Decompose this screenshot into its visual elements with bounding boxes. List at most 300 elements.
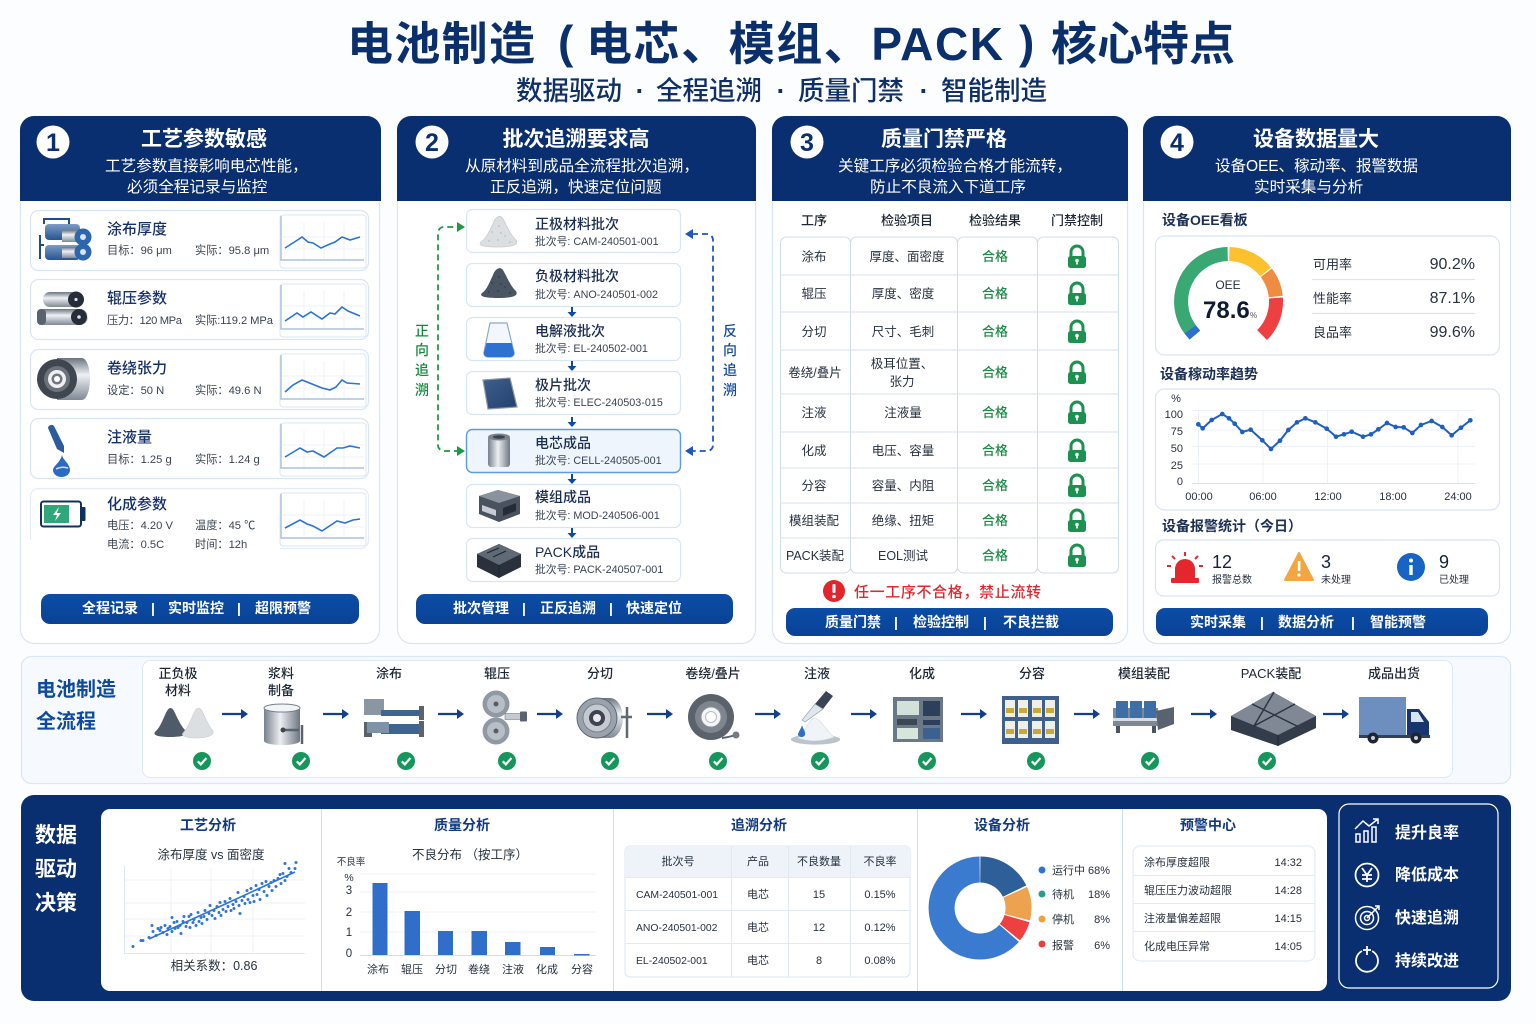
panel 4: equipment data [1143, 116, 1511, 644]
batch: electrolyte [466, 318, 680, 360]
bar chart: 1 [346, 927, 352, 939]
row: coating thickness: 涂布厚度 [107, 220, 167, 238]
row: coating thickness: 实际：95.8 μm [195, 243, 269, 257]
process analysis: 涂布厚度 vs 面密度 [158, 847, 265, 862]
batch: module: 模组成品 [535, 489, 591, 505]
panel 4 header: 设备OEE、稼动率、报警数据 [1215, 157, 1418, 175]
icon: pack box [477, 544, 521, 578]
sparkline [280, 215, 366, 268]
donut legend: 停机 [1052, 912, 1074, 926]
row: module assembly: 合格 [982, 513, 1008, 528]
utilization chart: 18:00 [1379, 491, 1407, 503]
sparkline [280, 284, 366, 337]
alarm card: 12 [1212, 552, 1232, 572]
benefits box: 持续改进 [1395, 952, 1459, 970]
icon: siren [1167, 552, 1203, 583]
subtitle: · [777, 76, 785, 106]
table header: 检验结果 [969, 213, 1021, 228]
batch: electrode sheet [466, 372, 680, 414]
band label: 决策 [35, 892, 77, 915]
quality analysis: 质量分析 [434, 817, 490, 833]
icon: coating machine [364, 699, 424, 737]
panel 1 header: 工艺参数直接影响电芯性能， [105, 157, 308, 175]
title: ( [558, 16, 574, 68]
panel 2 header: 2 [425, 129, 439, 157]
tag bar: | [522, 600, 526, 616]
batch: module: 批次号: MOD-240506-001 [535, 508, 660, 522]
row: calendering: 合格 [982, 286, 1008, 301]
band title: 全流程 [36, 709, 96, 733]
row: formation parameters: 电压：4.20 V [107, 519, 173, 532]
panel 2 header: 批次追溯要求高 [502, 127, 650, 151]
trace table: 0.12% [864, 922, 896, 934]
row: injection amount: 实际：1.24 g [195, 452, 260, 466]
row: formation: 合格 [982, 443, 1008, 458]
panel 4 header: 设备数据量大 [1253, 128, 1379, 151]
band inner card [142, 660, 1452, 778]
trace table: 15 [813, 889, 825, 901]
icon: warning triangle [1285, 553, 1313, 580]
OEE gauge: OEE [1215, 278, 1241, 292]
step labels: PACK装配 [1241, 666, 1301, 681]
benefits box: 提升良率 [1395, 823, 1459, 842]
icon: light powder pile [480, 217, 517, 247]
panel 2 header: 正反追溯，快速定位问题 [490, 178, 662, 196]
label: forward trace: 溯 [415, 382, 429, 398]
panel 3 header: 防止不良流入下道工序 [870, 178, 1026, 196]
row: coating: 涂布 [801, 249, 827, 264]
bar chart: 辊压 [401, 962, 423, 976]
tag bar: | [1260, 614, 1264, 630]
row: formation parameters: 化成参数 [107, 495, 167, 513]
batch: cell product (highlight): 电芯成品 [535, 435, 591, 451]
traceability analysis [625, 817, 910, 977]
trace table: 不良率 [864, 854, 896, 868]
subtitle: 全程追溯 [656, 76, 762, 106]
step labels: 模组装配 [1118, 666, 1170, 681]
alarm card: 3 [1321, 552, 1331, 572]
panel 2: batch traceability [397, 116, 756, 644]
row: module assembly: 模组装配 [789, 514, 839, 528]
utilization line [1196, 412, 1473, 451]
donut legend: 18% [1088, 889, 1110, 901]
trace table: 0.08% [864, 955, 896, 967]
equipment analysis [942, 817, 1110, 952]
row: pack assembly: 合格 [982, 548, 1008, 563]
benefits box: 降低成本 [1395, 865, 1459, 884]
label: backward trace [723, 323, 737, 398]
row: injection amount: 注液量 [107, 428, 152, 446]
utilization chart: 25 [1171, 460, 1183, 472]
label: forward trace: 追 [415, 362, 429, 378]
row: calendering: 压力：120 MPa [107, 314, 183, 327]
row: injection: 合格 [982, 405, 1008, 420]
bar chart: 0 [346, 948, 352, 960]
row: coating [801, 246, 1086, 268]
process analysis [124, 817, 305, 973]
process flow band [22, 656, 1510, 784]
row: calendering: 辊压 [801, 287, 827, 301]
row: coating thickness [30, 210, 368, 270]
icon: continuous improvement [1356, 946, 1378, 972]
tag bar: 数据分析 [1278, 614, 1334, 630]
tag bar: 批次管理 [453, 600, 509, 616]
row: slitting: 合格 [982, 324, 1008, 339]
alarm card: 9 [1439, 552, 1449, 572]
gate warning [823, 580, 1041, 602]
table header: 门禁控制 [1051, 213, 1103, 228]
batch: cell product (highlight): 批次号: CELL-240505-001 [535, 453, 662, 467]
icon: slurry tank [264, 704, 302, 745]
OEE metrics: 良品率 [1313, 325, 1352, 340]
bar chart: 3 [346, 885, 352, 897]
bar chart: 分容 [571, 962, 593, 976]
title [347, 16, 1235, 70]
icon: battery [41, 502, 86, 526]
icon: cell cylinder [488, 434, 510, 467]
icon: grading rack [1002, 696, 1059, 744]
panel 3 header: 质量门禁严格 [881, 128, 1007, 151]
trace table: CAM-240501-001 [636, 890, 718, 901]
step labels: 涂布 [376, 666, 402, 681]
batch: anode material [466, 264, 680, 306]
donut legend [1038, 864, 1110, 952]
panel 2 header: 从原材料到成品全流程批次追溯， [465, 157, 699, 175]
icon: coater [40, 219, 92, 260]
subtitle: 智能制造 [941, 76, 1047, 106]
tag bar: | [609, 600, 613, 616]
panel 4 header: 4 [1170, 129, 1184, 157]
OEE metrics: 90.2% [1430, 256, 1475, 273]
scatter plot [124, 862, 305, 954]
batch: pack [466, 538, 680, 582]
row: winding tension: 设定：50 N [107, 383, 164, 397]
alert list: 14:15 [1274, 913, 1302, 925]
tag bar: 超限预警 [255, 600, 311, 616]
row: winding: 合格 [982, 365, 1008, 380]
bar chart [346, 874, 596, 976]
process analysis: 工艺分析 [180, 817, 236, 833]
OEE metrics: 可用率 [1313, 257, 1352, 272]
data-driven decision band [21, 795, 1511, 1001]
batch: anode material: 负极材料批次 [535, 268, 619, 284]
tag bar: 实时采集 [1190, 614, 1246, 630]
alert list: 涂布厚度超限 [1144, 855, 1210, 869]
step labels: 化成 [909, 666, 935, 681]
OEE metrics: 87.1% [1430, 290, 1475, 307]
subtitle: · [920, 76, 928, 106]
row: formation parameters [30, 488, 368, 551]
step labels: 材料 [165, 683, 191, 698]
batch: cathode material: 正极材料批次 [535, 216, 619, 232]
flow arrows [222, 709, 1349, 719]
alarm card: 报警总数 [1212, 573, 1252, 586]
process analysis: 相关系数：0.86 [171, 958, 257, 973]
alert list: 辊压压力波动超限 [1144, 883, 1232, 897]
subtitle [516, 76, 1047, 106]
tag bar: 正反追溯 [540, 600, 596, 616]
row: injection amount: 目标：1.25 g [107, 453, 172, 466]
band title: 电池制造 [36, 678, 116, 701]
icon: info [1397, 553, 1425, 581]
subtitle: · [636, 76, 644, 106]
icon: press rollers [37, 292, 88, 325]
icon: raw material piles [154, 708, 213, 738]
label: backward trace: 溯 [723, 382, 737, 398]
row: slitting: 尺寸、毛刺 [872, 325, 934, 339]
OEE metrics [1312, 256, 1475, 341]
subtitle: 质量门禁 [798, 76, 904, 106]
donut legend: 8% [1094, 914, 1110, 926]
row: calendering: 辊压参数 [107, 289, 167, 307]
OEE gauge [1181, 254, 1276, 335]
row: winding tension: 卷绕张力 [107, 360, 167, 377]
batch: electrode sheet: 批次号: ELEC-240503-015 [535, 395, 663, 409]
band label: 驱动 [35, 858, 77, 881]
label: forward trace [415, 323, 429, 398]
quality analysis [337, 817, 596, 976]
batch: cathode material: 批次号: CAM-240501-001 [535, 234, 659, 248]
icon: cost reduction [1356, 864, 1378, 886]
tag bar [41, 594, 359, 624]
row: injection: 注液量 [884, 405, 922, 420]
batch: electrolyte: 批次号: EL-240502-001 [535, 341, 648, 355]
backward trace arrow [685, 229, 713, 456]
panel 4 header [1143, 116, 1511, 201]
row: injection amount [30, 418, 368, 478]
batch: pack: 批次号: PACK-240507-001 [535, 562, 663, 576]
alert list: 14:05 [1274, 941, 1302, 953]
donut legend: 6% [1094, 940, 1110, 952]
label: forward trace: 向 [415, 342, 429, 358]
tag bar: 不良拦截 [1003, 614, 1059, 630]
trace table: 电芯 [747, 887, 769, 901]
tag bar: 全程记录 [82, 600, 138, 616]
forward trace arrow [438, 222, 465, 456]
subtitle: 数据驱动 [516, 76, 622, 106]
trace table: 不良数量 [797, 854, 841, 868]
icon: pack assembly [1231, 692, 1316, 746]
row: slitting: 分切 [801, 325, 827, 339]
table header [801, 213, 1103, 228]
row: calendering: 实际:119.2 MPa [195, 313, 274, 327]
row: formation parameters: 温度：45 ℃ [195, 518, 255, 532]
trace table: 批次号 [662, 854, 694, 868]
bar chart: 卷绕 [468, 962, 490, 976]
row: calendering [30, 280, 368, 340]
row: winding: 极耳位置、 [871, 356, 933, 371]
row: formation: 电压、容量 [872, 443, 934, 458]
tag bar: | [894, 614, 898, 630]
icon: rollers [482, 690, 527, 744]
row: calendering [801, 283, 1086, 305]
donut legend: 报警 [1052, 938, 1074, 952]
icon: winding roll [37, 358, 90, 400]
row: injection: 注液 [801, 405, 827, 420]
step labels [158, 666, 1420, 698]
tag bar: 智能预警 [1370, 614, 1426, 630]
row: pack assembly [786, 545, 1086, 567]
table header: 工序 [801, 213, 827, 228]
row: formation parameters: 时间：12h [195, 538, 247, 551]
icon: formation cabinet [893, 697, 943, 742]
heading: utilization trend: 设备稼动率趋势 [1160, 366, 1258, 382]
batch: anode material: 批次号: ANO-240501-002 [535, 287, 658, 301]
arrow [568, 474, 576, 484]
row: grading: 分容 [801, 478, 827, 493]
batch: cathode material [466, 210, 680, 252]
alarm card: 未处理 [1321, 574, 1351, 586]
alert list [1133, 846, 1315, 961]
alarm card [1156, 540, 1500, 596]
donut legend: 68% [1088, 865, 1110, 877]
step labels: 浆料 [268, 666, 294, 681]
batch: module [466, 484, 680, 528]
band label: 数据 [35, 824, 77, 847]
batch: pack: PACK成品 [535, 544, 600, 560]
band label [35, 824, 77, 915]
step labels: 成品出货 [1368, 666, 1420, 681]
bar chart: 化成 [536, 962, 558, 976]
gate warning: 任一工序不合格，禁止流转 [854, 584, 1041, 601]
alert center: 预警中心 [1180, 817, 1236, 833]
icon: dark powder pile [481, 268, 517, 298]
row: calendering: 厚度、密度 [872, 286, 935, 301]
tag bar [416, 594, 733, 624]
step labels: 制备 [268, 683, 294, 698]
row: winding tension: 实际：49.6 N [195, 383, 262, 397]
table header: 检验项目 [881, 213, 933, 228]
panel 1 header: 必须全程记录与监控 [127, 178, 268, 196]
tag bar [1156, 608, 1488, 636]
arrow [568, 361, 576, 371]
row: pack assembly: PACK装配 [786, 549, 845, 563]
trace table: 0.15% [864, 889, 896, 901]
batch: electrolyte: 电解液批次 [535, 323, 605, 339]
benefits box [1339, 804, 1498, 988]
alarm card: 已处理 [1439, 574, 1469, 586]
row: winding: 卷绕/叠片 [788, 365, 842, 380]
alert center [1133, 817, 1315, 961]
row: grading: 合格 [982, 478, 1008, 493]
tag bar: | [1351, 614, 1355, 630]
bar chart: 2 [346, 907, 352, 919]
donut legend: 待机 [1052, 887, 1074, 901]
panel 1 header [20, 116, 381, 201]
equipment analysis: 设备分析 [974, 817, 1030, 833]
tag bar: 快速定位 [626, 600, 682, 616]
traceability analysis: 追溯分析 [731, 817, 787, 833]
trace table [625, 846, 910, 977]
row: coating: 厚度、面密度 [869, 249, 945, 264]
quality analysis: % [344, 872, 354, 884]
alert list: 注液量偏差超限 [1144, 911, 1221, 925]
sparkline [280, 423, 366, 476]
bar chart: 分切 [435, 963, 457, 976]
tag bar: 实时监控 [168, 600, 224, 616]
utilization chart: 12:00 [1314, 491, 1342, 503]
icon: module box [479, 490, 520, 522]
trace table: 电芯 [747, 920, 769, 934]
panel 1: process parameters [20, 116, 381, 644]
icon: module assembly [1113, 701, 1174, 733]
alert list: 化成电压异常 [1144, 939, 1210, 953]
batch: electrode sheet: 极片批次 [535, 377, 591, 393]
step labels: 卷绕/叠片 [685, 666, 741, 681]
row: pack assembly: EOL测试 [878, 548, 929, 563]
row: coating: 合格 [982, 249, 1008, 264]
step labels: 分容 [1019, 666, 1045, 681]
tag bar: 质量门禁 [825, 614, 881, 630]
arrow [568, 528, 576, 538]
title: 电池制造 [347, 18, 535, 70]
row: formation [801, 440, 1086, 462]
title: ) [1019, 16, 1034, 68]
inspection table [780, 237, 1119, 573]
label: forward trace: 正 [415, 323, 429, 339]
row: winding tension [30, 350, 368, 410]
panel 3 header: 3 [800, 129, 814, 157]
row: winding [788, 356, 1086, 389]
panel 4 header: 实时采集与分析 [1254, 178, 1363, 196]
sparkline [280, 493, 366, 546]
utilization chart: 75 [1171, 426, 1183, 438]
analytics white card [101, 809, 1327, 991]
benefits box: 快速追溯 [1395, 908, 1459, 927]
panel 3 header [772, 116, 1128, 201]
icon: flask [484, 323, 514, 357]
label: backward trace: 向 [723, 342, 737, 358]
icon: slitting roll [577, 698, 632, 738]
icon: injection dropper [791, 691, 840, 745]
tag bar: | [983, 614, 987, 630]
panel 3: quality gates [772, 116, 1128, 644]
row: formation parameters: 电流：0.5C [107, 537, 164, 551]
row: grading [801, 475, 1086, 497]
row: grading: 容量、内阻 [872, 478, 935, 493]
OEE metrics: 性能率 [1313, 291, 1352, 306]
trace table: ANO-240501-002 [636, 923, 718, 934]
OEE card [1156, 236, 1500, 355]
OEE gauge: % [1250, 311, 1257, 320]
alert list: 14:32 [1274, 857, 1302, 869]
icon: delivery truck [1359, 697, 1430, 744]
heading: alarm stats: 设备报警统计（今日） [1162, 518, 1302, 534]
utilization chart: 06:00 [1249, 491, 1277, 503]
panel 1 header: 工艺参数敏感 [141, 127, 267, 151]
batch: cell product (highlight) [466, 430, 680, 472]
tag bar: | [151, 600, 155, 616]
row: module assembly: 绝缘、扭矩 [872, 513, 934, 528]
row: formation: 化成 [801, 444, 827, 458]
panel 1 header: 1 [46, 129, 60, 157]
arrow [568, 307, 576, 317]
OEE metrics: 99.6% [1430, 324, 1475, 341]
utilization chart [1156, 389, 1500, 510]
step labels: 正负极 [158, 666, 198, 681]
heading: OEE board: 设备OEE看板 [1162, 212, 1248, 228]
tag bar: 检验控制 [913, 614, 969, 630]
icon: injection pen and drop [48, 425, 70, 477]
utilization chart: 00:00 [1185, 491, 1213, 503]
trace table: 产品 [747, 854, 769, 868]
quality analysis: 不良率 [337, 856, 366, 868]
title: 核心特点 [1051, 18, 1235, 70]
bar chart: 涂布 [367, 962, 389, 976]
bar chart: 注液 [502, 962, 524, 976]
OEE gauge: 78.6 [1203, 297, 1250, 324]
quality analysis: 不良分布 （按工序） [412, 847, 528, 862]
